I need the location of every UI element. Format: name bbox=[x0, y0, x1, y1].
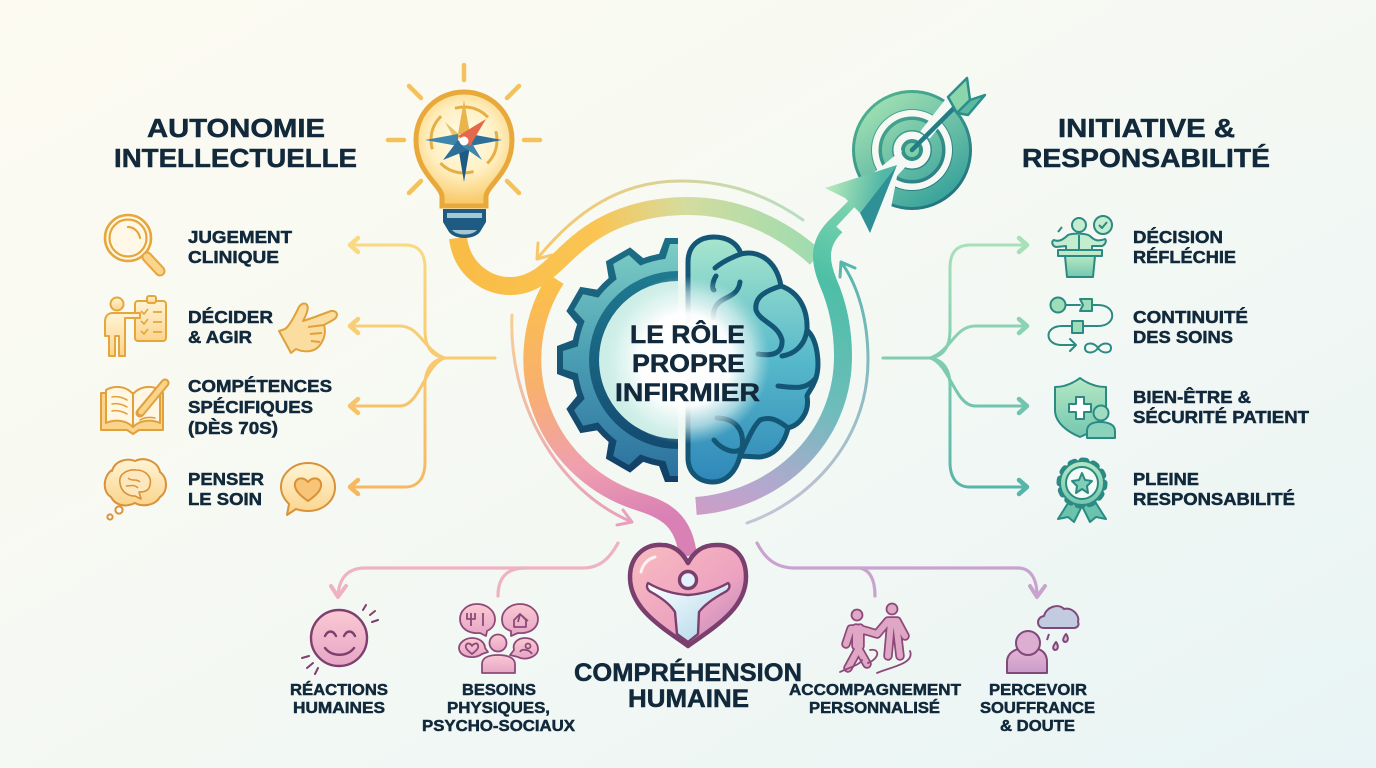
label: accompagnement personnalisé: ACCOMPAGNEMENT bbox=[789, 682, 961, 699]
connector: bottom right branch bbox=[757, 543, 1045, 597]
heading: initiative et responsabilité: RESPONSABILITÉ bbox=[1022, 143, 1270, 173]
target fletching bbox=[948, 78, 985, 115]
icon: speech bubble with heart bbox=[281, 463, 335, 515]
title: le rôle propre infirmier bbox=[615, 319, 760, 407]
label: pleine responsabilité: RESPONSABILITÉ bbox=[1133, 488, 1295, 509]
ring: top arc with bulb stem bbox=[458, 206, 816, 286]
icon: two people walking bbox=[840, 604, 911, 673]
label: jugement clinique bbox=[188, 227, 292, 267]
icon: open book and pencil bbox=[101, 383, 165, 434]
label: accompagnement personnalisé: PERSONNALISÉ bbox=[809, 698, 940, 717]
panel: initiative items bbox=[1048, 216, 1309, 522]
label: jugement clinique: CLINIQUE bbox=[188, 247, 279, 267]
icon: heart with person bbox=[630, 545, 746, 646]
label: percevoir souffrance et doute: & DOUTE bbox=[1000, 718, 1075, 735]
heading: initiative et responsabilité bbox=[1022, 113, 1270, 173]
connector: right tree bbox=[883, 238, 1027, 494]
central ring bbox=[458, 200, 862, 556]
label: percevoir souffrance et doute: SOUFFRANCE bbox=[980, 700, 1095, 717]
figure in heart bbox=[647, 572, 729, 642]
heart highlight bbox=[641, 557, 655, 572]
icon: thought cloud with brain bbox=[105, 459, 166, 520]
target rings bbox=[862, 100, 962, 200]
heading: initiative et responsabilité: INITIATIVE & bbox=[1058, 113, 1235, 143]
icon: needs bubbles bbox=[459, 604, 538, 673]
icon: shield with patient bbox=[1055, 378, 1115, 438]
compass bbox=[425, 100, 502, 182]
label: bien-être et sécurité patient: BIEN-ÊTRE & bbox=[1133, 386, 1251, 407]
title: le rôle propre infirmier: PROPRE bbox=[632, 350, 745, 378]
label: réactions humaines: RÉACTIONS bbox=[290, 680, 388, 699]
heading: compréhension humaine: COMPRÉHENSION bbox=[574, 658, 802, 687]
icon: care continuity flow bbox=[1048, 298, 1112, 352]
arrow: right return arc bbox=[747, 262, 868, 523]
panel: autonomie items bbox=[101, 215, 337, 520]
connector: orbit thin arrows bbox=[512, 181, 868, 525]
bulb base bbox=[443, 209, 486, 238]
label: besoins physiques: BESOINS bbox=[462, 682, 536, 699]
label: pleine responsabilité bbox=[1133, 469, 1295, 509]
label: décider et agir bbox=[188, 306, 273, 347]
label: penser le soin: LE SOIN bbox=[188, 489, 262, 509]
label: penser le soin: PENSER bbox=[188, 469, 264, 489]
heading: autonomie intellectuelle bbox=[114, 113, 357, 173]
label: décision réfléchie: RÉFLÉCHIE bbox=[1133, 246, 1236, 267]
label: décider et agir: & AGIR bbox=[188, 327, 252, 347]
icon: magnifier bbox=[105, 215, 160, 271]
label: bien-être et sécurité patient: SÉCURITÉ PATIENT bbox=[1133, 406, 1309, 427]
title: le rôle propre infirmier: LE RÔLE bbox=[630, 319, 745, 349]
white wedge bbox=[925, 88, 962, 135]
label: compétences spécifiques: (DÈS 70S) bbox=[188, 417, 278, 438]
brain half bbox=[688, 237, 818, 482]
label: réactions humaines: HUMAINES bbox=[293, 700, 385, 717]
label: compétences spécifiques: SPÉCIFIQUES bbox=[188, 396, 313, 417]
icon: pointing hand bbox=[279, 303, 337, 353]
label: accompagnement personnalisé bbox=[789, 682, 961, 717]
label: besoins physiques: PSYCHO-SOCIAUX bbox=[422, 718, 575, 735]
label: jugement clinique: JUGEMENT bbox=[188, 227, 292, 247]
arrow: top return arc bbox=[537, 181, 803, 259]
panel: comprehension items bbox=[290, 604, 1095, 735]
connector: left tree bbox=[350, 238, 495, 494]
bulb glass bbox=[416, 92, 512, 206]
bulb rays bbox=[388, 65, 540, 193]
ring: left orange to pink arc bbox=[532, 279, 688, 556]
gear half bbox=[557, 238, 678, 482]
icon: lightbulb with compass bbox=[388, 65, 540, 238]
arrowhead: bottom left bbox=[331, 586, 346, 597]
label: compétences spécifiques: COMPÉTENCES bbox=[188, 375, 332, 396]
heading: compréhension humaine bbox=[574, 658, 802, 713]
label: besoins physiques: PHYSIQUES, bbox=[447, 700, 550, 717]
arrowhead: bottom right bbox=[1030, 586, 1045, 597]
arrow head bbox=[825, 165, 897, 233]
heading: autonomie intellectuelle: INTELLECTUELLE bbox=[114, 143, 357, 173]
label: besoins physiques bbox=[422, 682, 575, 735]
label: pleine responsabilité: PLEINE bbox=[1133, 469, 1199, 489]
label: continuité des soins: CONTINUITÉ bbox=[1133, 306, 1248, 327]
label: réactions humaines bbox=[290, 680, 388, 717]
label: percevoir souffrance et doute bbox=[980, 682, 1095, 735]
icon: person under rain cloud bbox=[1007, 606, 1079, 673]
icon: person with checklist bbox=[105, 296, 166, 356]
title: le rôle propre infirmier: INFIRMIER bbox=[615, 379, 760, 407]
label: continuité des soins: DES SOINS bbox=[1133, 327, 1233, 347]
label: bien-être et sécurité patient bbox=[1133, 386, 1309, 427]
arrow: left return arc bbox=[512, 315, 632, 525]
heart shape bbox=[630, 545, 746, 646]
icon: award rosette bbox=[1058, 461, 1106, 522]
arrowheads: right tree bbox=[1019, 238, 1027, 494]
label: décision réfléchie bbox=[1133, 226, 1236, 267]
label: penser le soin bbox=[188, 469, 264, 509]
target arrow shaft bbox=[912, 105, 957, 150]
icon: smiley bbox=[302, 605, 378, 674]
icon: gear and brain bbox=[550, 230, 818, 490]
heading: autonomie intellectuelle: AUTONOMIE bbox=[147, 113, 325, 143]
label: décider et agir: DÉCIDER bbox=[188, 306, 273, 327]
label: percevoir souffrance et doute: PERCEVOIR bbox=[989, 682, 1087, 699]
label: continuité des soins bbox=[1133, 306, 1248, 347]
central glow bbox=[602, 276, 770, 444]
label: compétences spécifiques bbox=[188, 375, 332, 438]
heading: compréhension humaine: HUMAINE bbox=[628, 685, 749, 713]
arrowheads: left tree bbox=[350, 238, 358, 494]
connector: bottom left branch bbox=[331, 543, 618, 597]
icon: target with arrow bbox=[825, 78, 985, 240]
ring: right teal arc and arrow stem bbox=[696, 200, 862, 506]
label: décision réfléchie: DÉCISION bbox=[1133, 226, 1223, 247]
icon: speaker at podium bbox=[1052, 216, 1112, 277]
